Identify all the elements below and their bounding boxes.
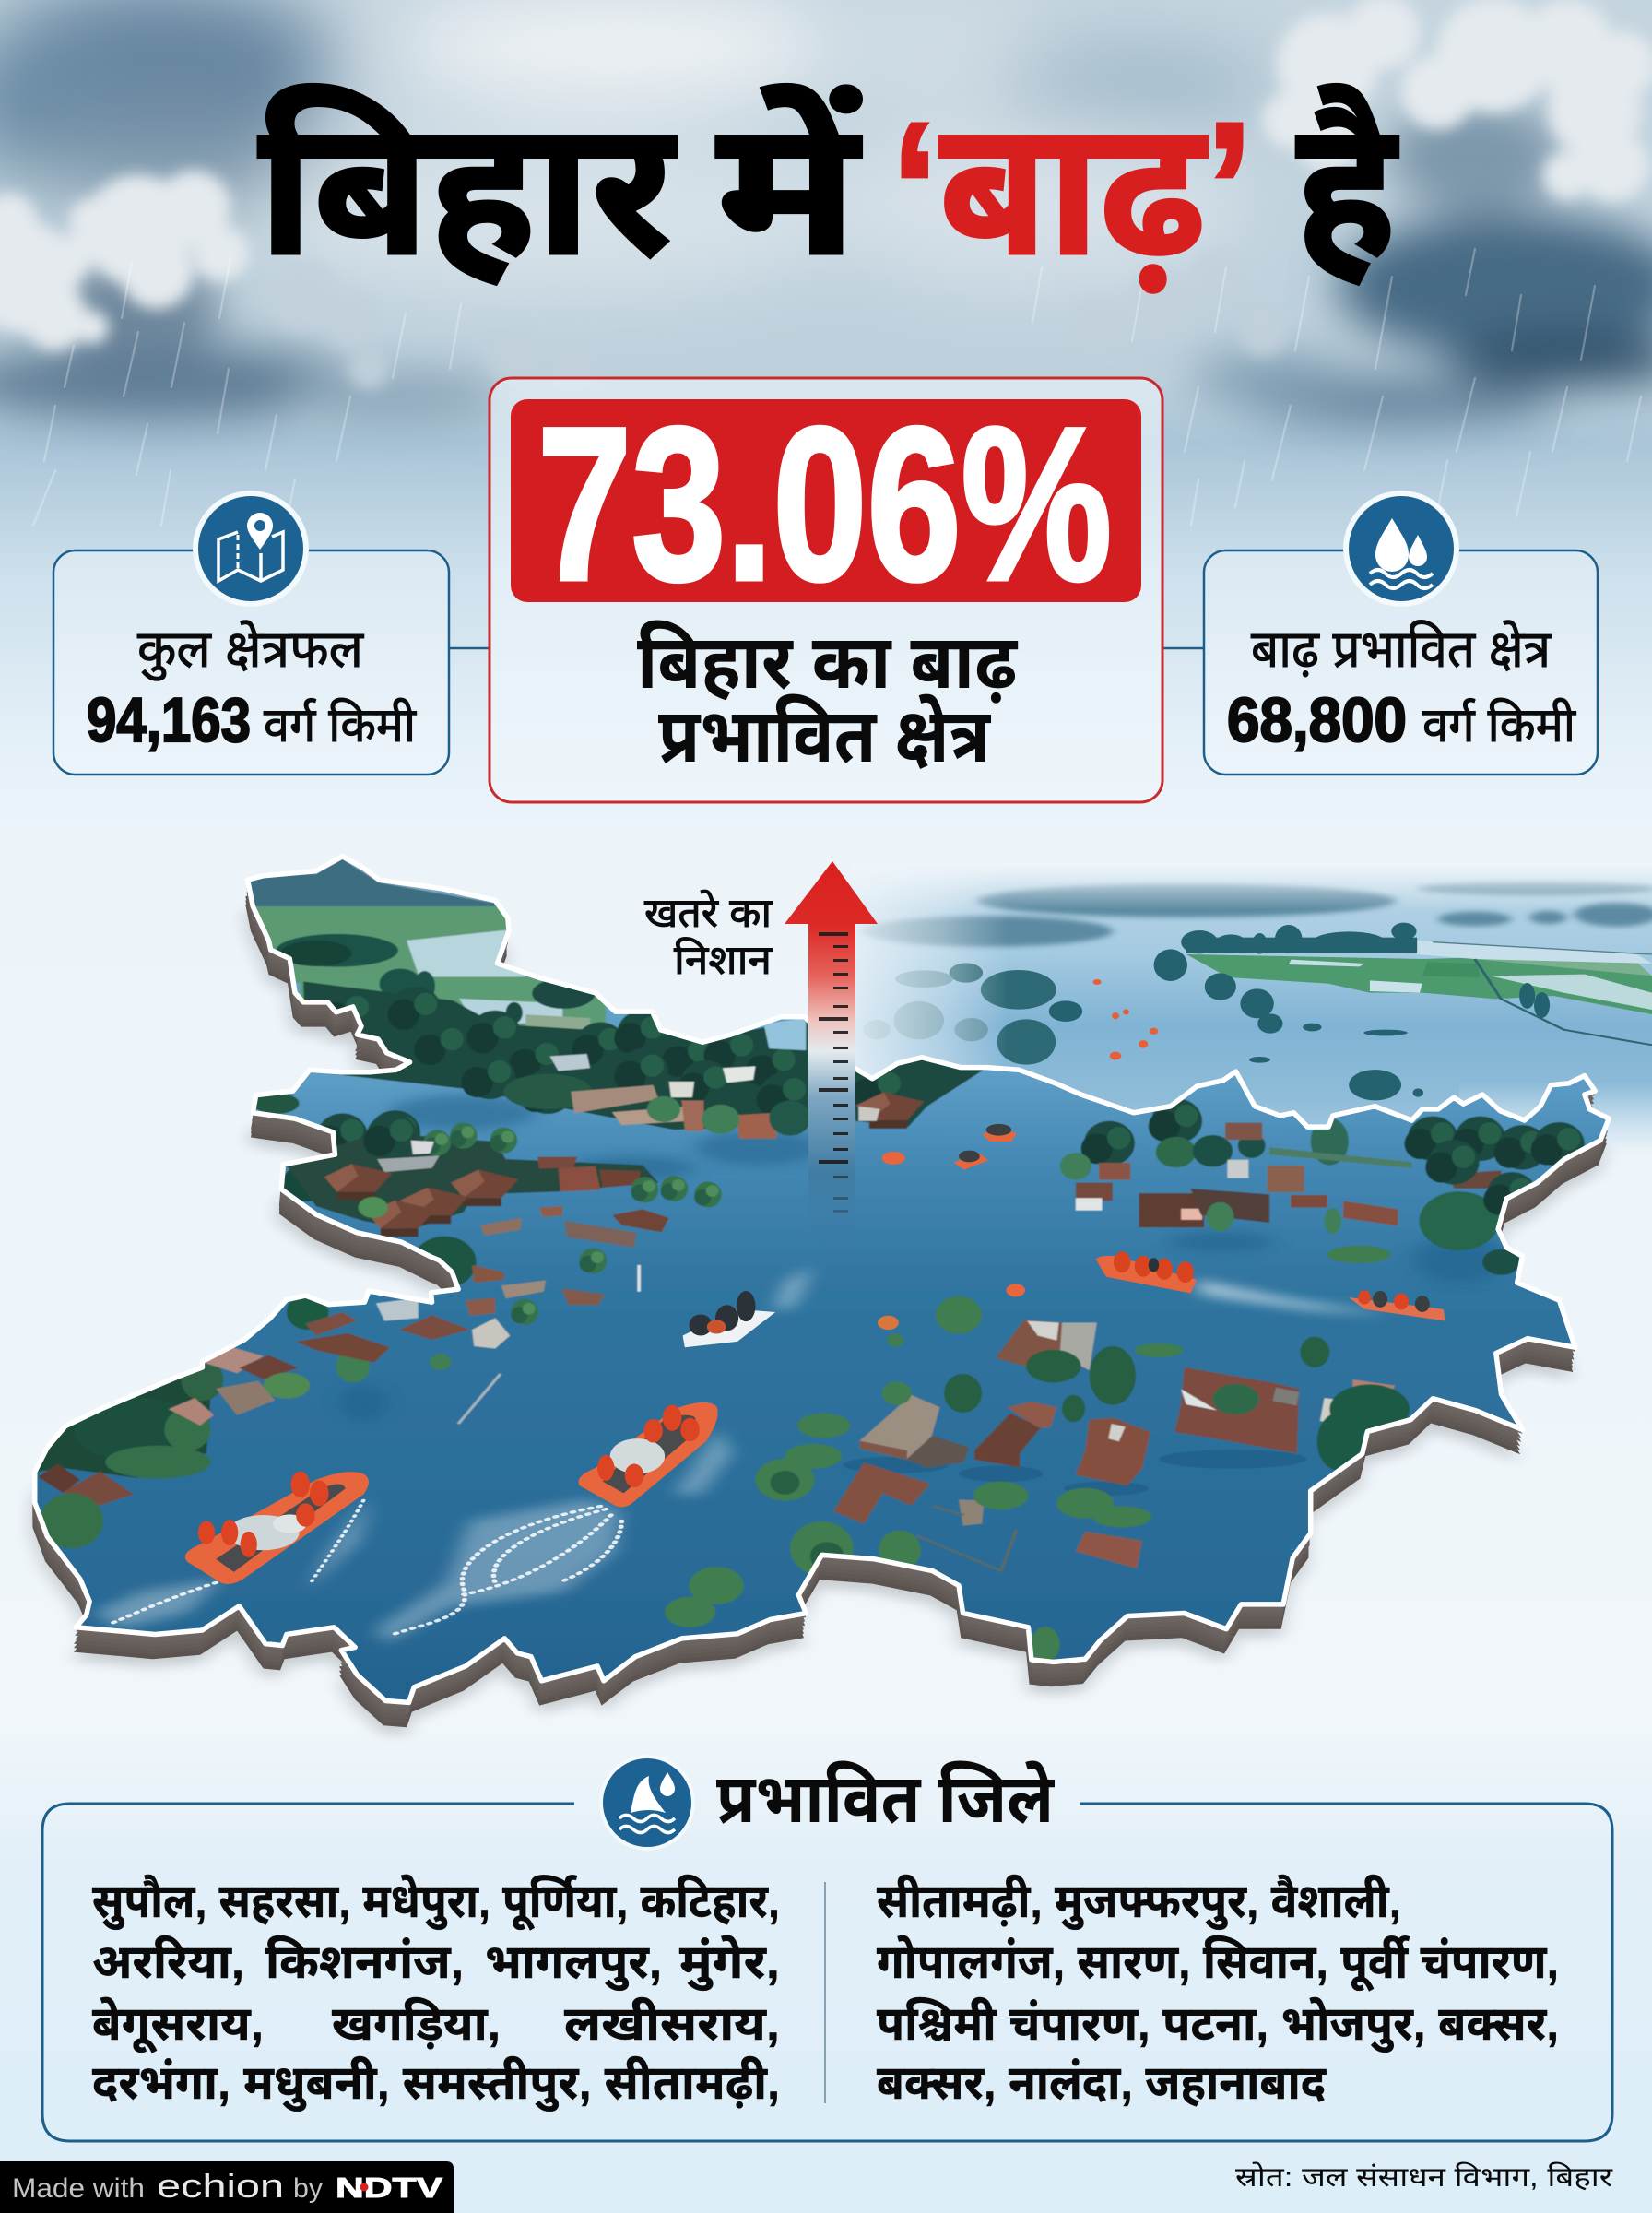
water reflections and ripples [340,1095,1506,1421]
source note: स्रोत: जल संसाधन विभाग, बिहार [1235,2161,1613,2193]
label: flood affected area: बाढ़ प्रभावित क्षेत्र [1251,620,1552,678]
badge: made with echion by NDTV: NDTV [336,2172,442,2204]
danger level gauge arrow [785,861,878,1242]
icon: map with pin [193,491,309,607]
flood landscape beyond the map [850,872,1652,1147]
west bank villages [253,1093,722,1325]
label: total area: कुल क्षेत्रफल [137,620,364,681]
connector lines [449,647,1204,649]
caption: flood affected area of Bihar [637,621,1018,778]
caption: flood affected area of Bihar: बिहार का बाढ़ [637,621,1018,704]
value: 68,800 sq km: 68,800 [1227,685,1407,755]
district list: left column: दरभंगा, मधुबनी, समस्तीपुर, सीतामढ़ी, [92,2056,780,2112]
northern fields and trees [242,854,987,1139]
white map outline [35,857,1609,1702]
central and eastern flooded houses [665,1296,1410,1662]
rescue boat wakes [94,1266,1391,1644]
district list: left column: बेगूसराय, [92,1996,264,2053]
badge: made with echion by NDTV: echion [157,2167,284,2205]
title: बिहार [258,83,678,294]
badge: made with echion by NDTV [0,2161,454,2213]
district list: left column: अररिया, [92,1935,244,1988]
statistic: 73.06%: 73.06% [537,383,1112,626]
value: 94,163 sq km: 94,163 [87,685,251,755]
district list: right column: पश्चिमी चंपारण, पटना, भोजपुर, बक्सर, [877,1997,1559,2053]
district list: right column: सीतामढ़ी, मुजफ्फरपुर, वैशाली, [877,1875,1401,1931]
district list: left column: भागलपुर, [485,1935,662,1992]
rescue boats [185,1124,1446,1584]
title [258,83,1399,294]
map of Bihar with flood scene [24,854,1613,2143]
title: में [716,83,862,294]
panel: affected districts [42,1755,1612,2141]
district list: right column: गोपालगंज, सारण, सिवान, पूर्वी चंपारण, [877,1935,1559,1992]
badge: made with echion by NDTV: by [293,2173,323,2204]
caption: flood affected area of Bihar: प्रभावित क्षेत्र [658,693,991,778]
title: ‘बाढ़’ [891,83,1254,294]
district list: left column: किशनगंज, [266,1935,464,1988]
icon: swimmer in water [599,1755,695,1851]
district list: right column [877,1875,1559,2109]
title: है [1296,83,1399,294]
northeast village and trees [1060,1098,1585,1275]
label: danger mark: निशान [674,937,773,983]
district list: left column [92,1874,780,2112]
district list: right column: बक्सर, नालंदा, जहानाबाद [877,2056,1327,2109]
district list: left column: मुंगेर, [679,1935,780,1992]
district list: left column: सुपौल, सहरसा, मधेपुरा, पूर्णिया, कटिहार, [92,1874,780,1931]
column divider [824,1882,826,2103]
value: 94,163 sq km [87,685,417,755]
heading: affected districts: प्रभावित जिले [716,1760,1055,1837]
panel: flood affected area [1204,491,1598,775]
panel: headline statistic [490,378,1162,802]
district list: left column: खगड़िया, [332,1997,501,2050]
icon: water drops over waves [1343,491,1459,607]
label: danger mark: खतरे का [644,889,773,936]
value: 94,163 sq km: वर्ग किमी [264,698,417,752]
badge: made with echion by NDTV: Made with [12,2173,145,2204]
red statistic banner [511,399,1141,602]
value: 68,800 sq km [1227,685,1576,755]
map surface: flood water, villages and boats [37,859,1606,1700]
southwest bank villages [35,1295,510,1548]
panel: total area [53,491,449,775]
value: 68,800 sq km: वर्ग किमी [1422,698,1576,752]
3D extrusion of map edge [31,860,1609,1735]
label: danger mark [644,889,773,983]
district list: left column: लखीसराय, [564,1997,780,2050]
